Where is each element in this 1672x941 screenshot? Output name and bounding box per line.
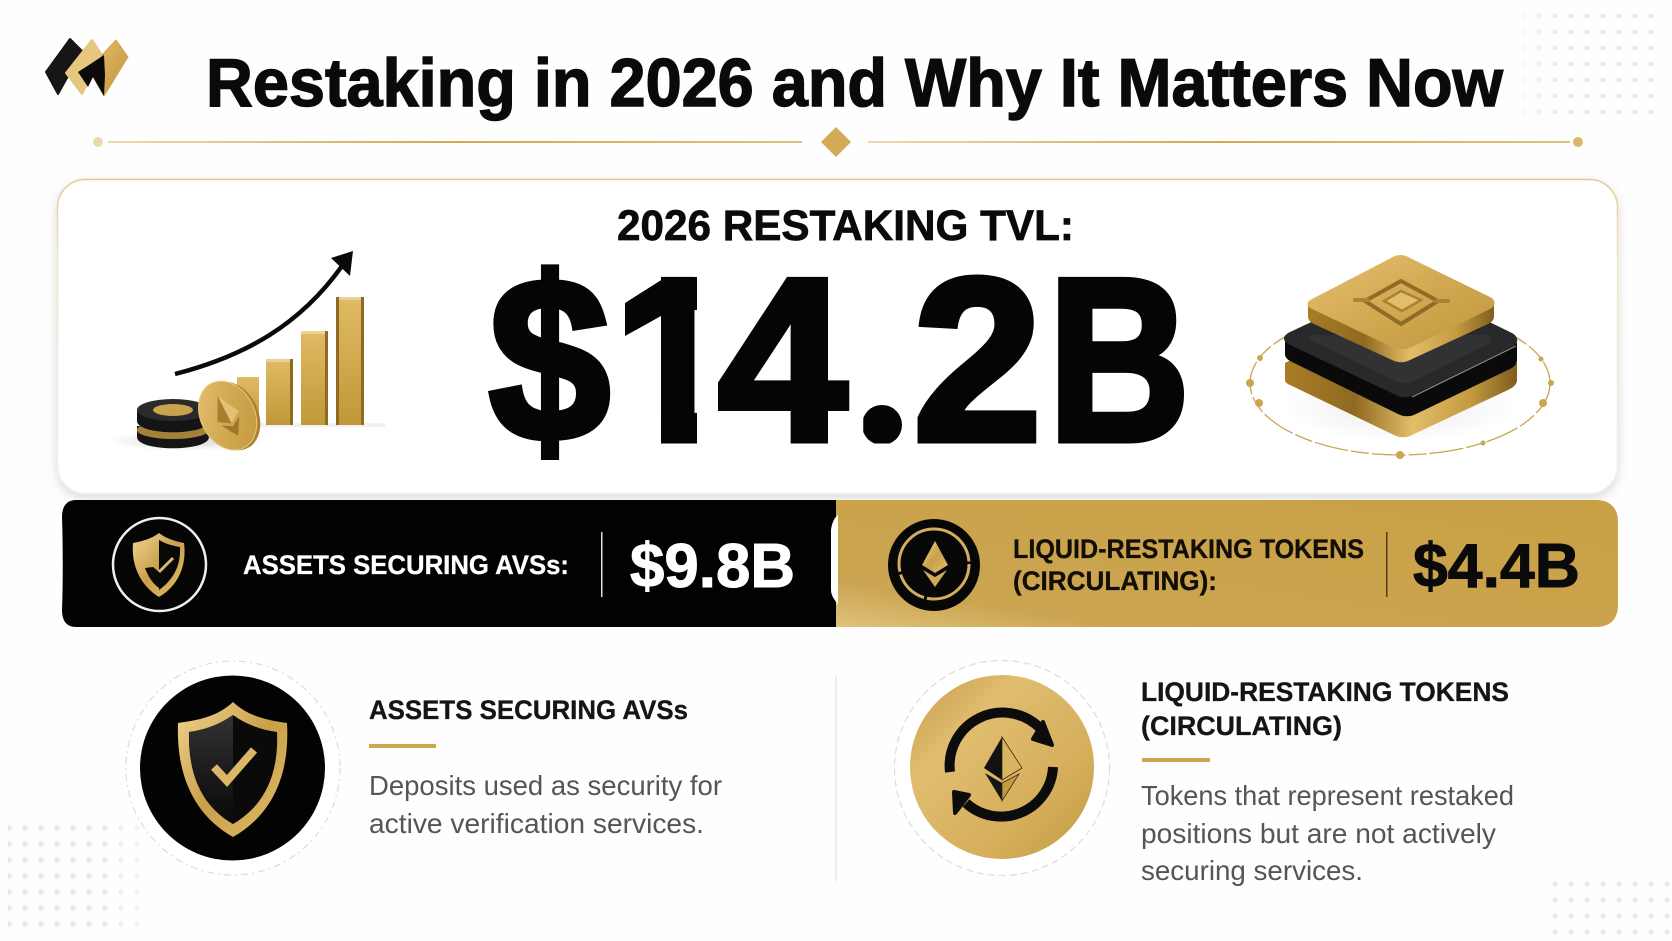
icon: tilted gold coin	[187, 370, 272, 462]
big number	[488, 264, 1184, 460]
label: ASSETS SECURING AVSs:	[243, 550, 569, 580]
text: assets securing AVSs: Deposits used as security for	[369, 770, 722, 801]
big number: 2	[913, 231, 1042, 490]
value: $4.4B	[1413, 532, 1580, 601]
middle black layer	[1284, 282, 1517, 416]
text: liquid-restaking tokens: positions but are not actively	[1141, 818, 1496, 849]
title: Restaking in 2026 and Why It Matters Now	[206, 45, 1504, 121]
text: liquid-restaking tokens: securing services.	[1141, 855, 1363, 886]
big number: 4	[718, 231, 847, 490]
icon: shield with check	[126, 661, 340, 875]
icon: ethereum with cycle arrows	[894, 660, 1110, 876]
icon: layered restaking stack	[1246, 255, 1554, 459]
icon: gold shield badge	[113, 518, 206, 611]
label	[1013, 534, 1364, 596]
heading: 2026 restaking TVL: 2026 RESTAKING TVL:	[617, 202, 1074, 250]
icon: ethereum badge	[888, 519, 980, 611]
icon: black coin stack	[137, 399, 209, 448]
label: (CIRCULATING):	[1013, 566, 1217, 596]
top gold plate	[1308, 255, 1494, 362]
bar: liquid-restaking tokens	[831, 500, 1618, 627]
bottom gold layer	[1285, 300, 1517, 437]
text: assets securing AVSs: ASSETS SECURING AVSs	[369, 695, 688, 725]
big number: $	[489, 231, 610, 490]
text: liquid-restaking tokens: LIQUID-RESTAKING TOKENS	[1141, 677, 1509, 707]
big number: B	[1048, 231, 1190, 490]
logo	[46, 39, 128, 96]
arrow: growth	[175, 251, 353, 374]
text: liquid-restaking tokens: (CIRCULATING)	[1141, 711, 1342, 741]
panel: total value locked	[58, 180, 1618, 494]
big number: .	[851, 231, 915, 490]
text: assets securing AVSs	[369, 695, 722, 839]
label: LIQUID-RESTAKING TOKENS	[1013, 534, 1364, 564]
title divider	[93, 127, 1583, 157]
big number: 1	[605, 231, 734, 490]
bar: assets securing AVSs	[62, 500, 836, 627]
text: assets securing AVSs: active verification services.	[369, 808, 704, 839]
value: $9.8B	[630, 532, 795, 601]
icon: growth chart with coins	[106, 251, 385, 462]
text: liquid-restaking tokens: Tokens that represent restaked	[1141, 780, 1514, 811]
text: liquid-restaking tokens	[1141, 677, 1514, 886]
